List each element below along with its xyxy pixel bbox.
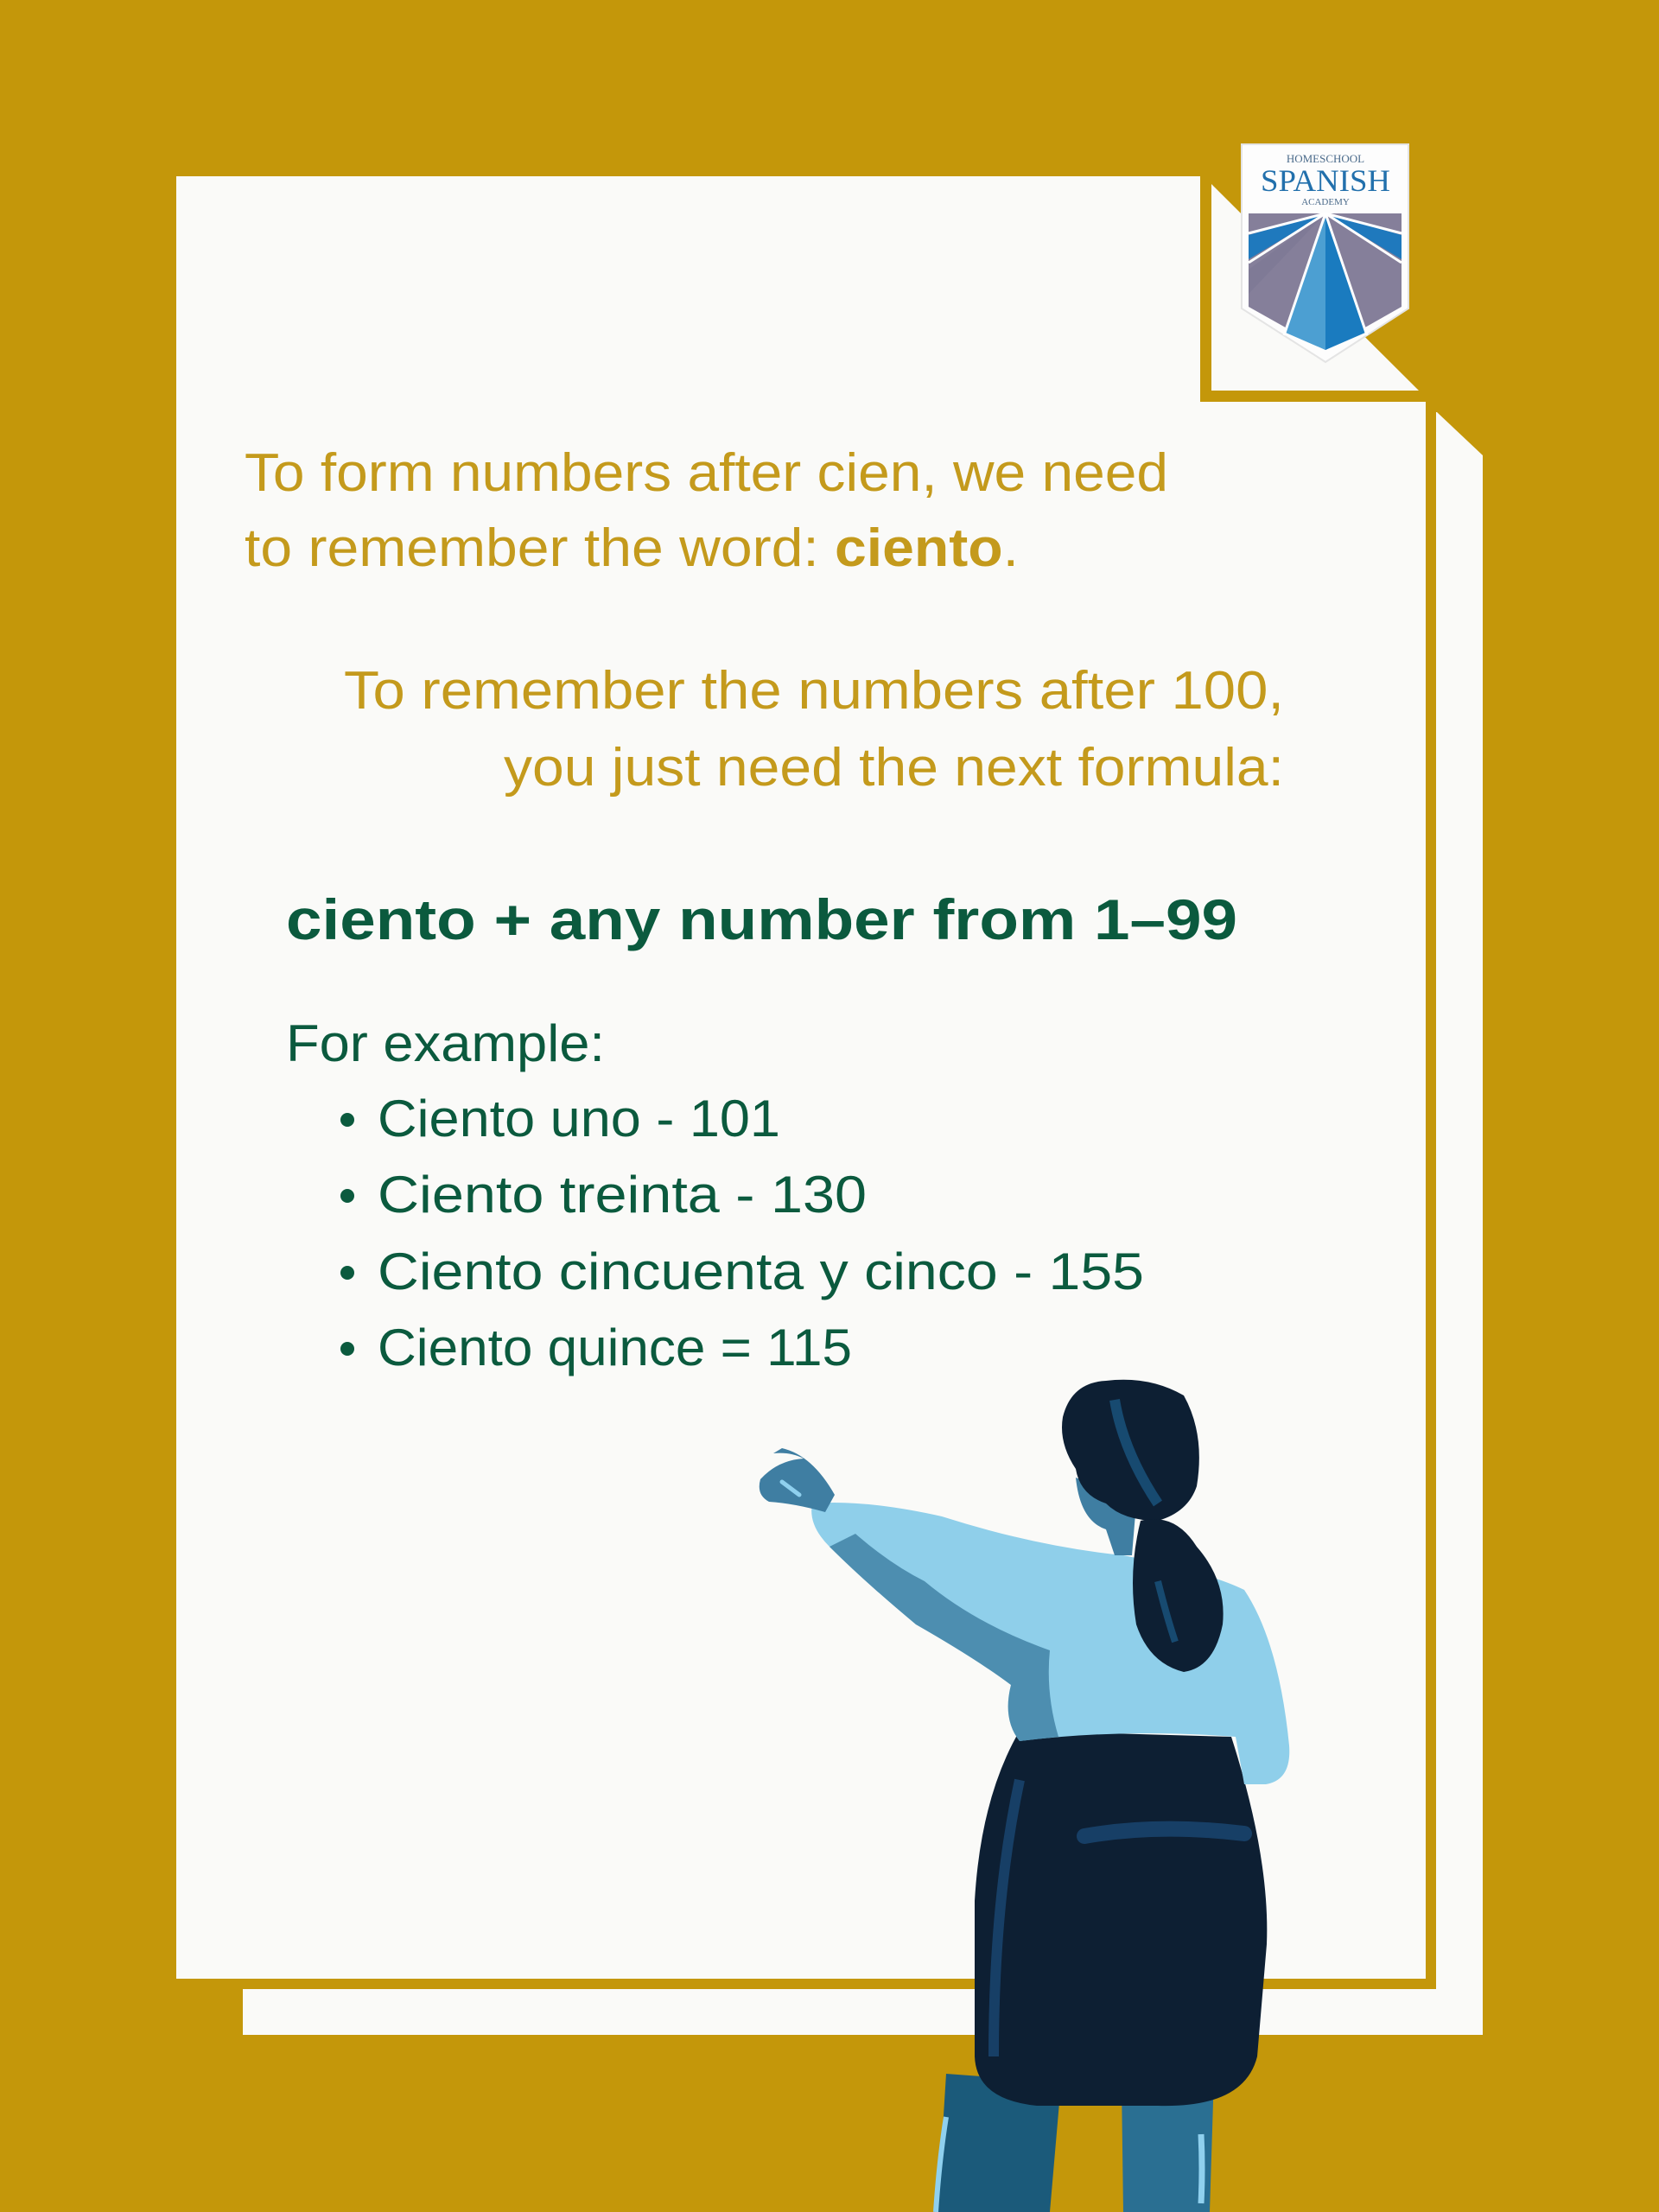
- list: examples: Ciento uno - 101: [378, 1090, 780, 1147]
- text block: formula intro: To remember the numbers after 100,: [344, 661, 1284, 721]
- text block: intro: [245, 443, 1168, 578]
- text block: intro: To form numbers after cien, we need: [245, 443, 1168, 503]
- panel: back page: [243, 412, 1483, 2035]
- list: examples: [340, 1090, 1144, 1376]
- list: examples: Ciento quince = 115: [378, 1319, 852, 1376]
- neck and face: [1076, 1478, 1136, 1555]
- text block: formula intro: [344, 661, 1284, 798]
- text block: intro: to remember the word: ciento.: [245, 518, 1019, 578]
- ponytail: [1133, 1519, 1224, 1672]
- heading: formula: ciento + any number from 1–99: [286, 887, 1237, 951]
- text: for example: For example:: [286, 1014, 605, 1072]
- panel: front page with gold border: [176, 176, 1436, 1989]
- illustration: woman pointing: [760, 1380, 1289, 2212]
- text block: formula intro: you just need the next formula:: [504, 738, 1284, 798]
- list: examples: Ciento treinta - 130: [378, 1166, 867, 1224]
- logo: Homeschool Spanish Academy: HOMESCHOOL: [1287, 152, 1364, 165]
- logo: Homeschool Spanish Academy: [1242, 144, 1408, 362]
- logo: Homeschool Spanish Academy: ACADEMY: [1301, 197, 1350, 207]
- hair: [1062, 1380, 1199, 1521]
- legs: [938, 2074, 1061, 2212]
- folded corner tab: [1211, 184, 1419, 391]
- logo: Homeschool Spanish Academy: SPANISH: [1261, 163, 1390, 198]
- hand: [760, 1448, 835, 1512]
- shirt and arm: [811, 1503, 1289, 1784]
- skirt: [975, 1731, 1267, 2106]
- list: examples: Ciento cincuenta y cinco - 155: [378, 1243, 1144, 1300]
